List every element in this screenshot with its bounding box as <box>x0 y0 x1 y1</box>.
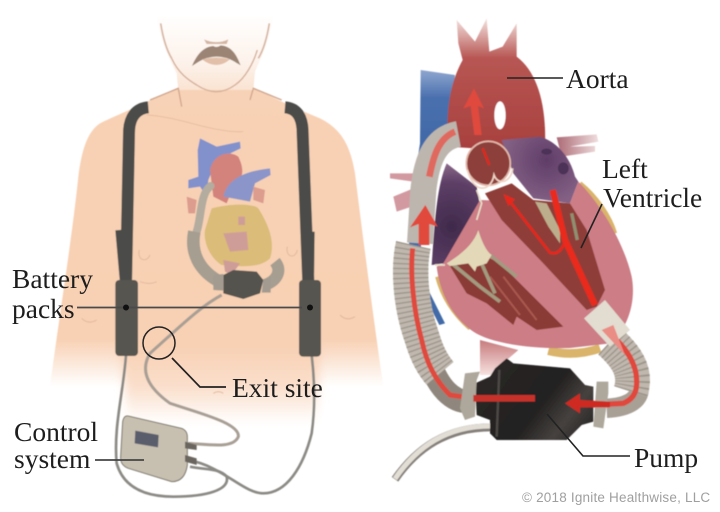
cannula outflow glow <box>602 325 625 355</box>
panel: patient body with device <box>50 17 383 497</box>
battery line <box>77 306 302 308</box>
small inflow corrugated graft <box>193 232 217 280</box>
driveline <box>145 295 238 445</box>
right atrium <box>432 163 480 265</box>
tricuspid valve <box>447 230 492 272</box>
pulmonary artery <box>223 168 271 202</box>
label: pump: Pump <box>634 442 698 473</box>
pulmonary veins right <box>557 134 598 157</box>
arch opening <box>494 101 506 129</box>
control unit <box>121 416 197 482</box>
pump flow arrow <box>565 393 610 413</box>
label: ventricle: Ventricle <box>603 182 702 213</box>
label: exit site: Exit site <box>232 372 323 403</box>
flow arrowhead <box>503 194 515 206</box>
papillary outlines <box>435 190 482 265</box>
moustache <box>192 45 241 66</box>
small heart <box>187 138 278 299</box>
label: battery packs: Battery <box>12 263 93 294</box>
exit site leader <box>172 358 226 387</box>
aortic valve <box>466 141 510 185</box>
pump flow lines <box>473 388 535 408</box>
great veins <box>188 138 241 197</box>
neck lines <box>150 88 282 107</box>
valve cusps <box>467 168 513 188</box>
pump body <box>475 358 593 440</box>
jaw lines <box>172 50 257 92</box>
aortic arch <box>447 18 545 150</box>
nipples and body lines <box>82 247 355 393</box>
sideburn right <box>258 23 269 58</box>
label: control: Control <box>14 416 98 447</box>
pericardial fat <box>437 183 615 353</box>
atrium spots <box>541 149 569 174</box>
aorta leader <box>507 77 563 79</box>
outflow corrugated graft <box>411 245 473 402</box>
small pump <box>223 270 263 299</box>
label: packs line: packs <box>12 293 75 324</box>
shoulder straps <box>119 107 311 283</box>
left atrium <box>502 137 578 203</box>
right battery cable <box>188 355 314 493</box>
pump leader <box>547 414 630 456</box>
olive leaflet <box>572 213 577 240</box>
blue vena cava <box>408 70 455 325</box>
pump collars <box>460 372 608 428</box>
battery connector dots <box>123 304 313 310</box>
right chamber trabeculae <box>452 255 537 320</box>
connectors <box>185 442 197 465</box>
red flow in ventricle <box>507 197 565 253</box>
fatty heart body <box>205 205 272 266</box>
mitral valve <box>535 202 560 243</box>
left battery cable <box>116 355 227 497</box>
flow arrow in aorta <box>463 88 484 135</box>
label: left: Left <box>602 153 648 184</box>
abdomen fade <box>120 340 320 427</box>
label: system: system <box>14 443 90 474</box>
mouth <box>202 58 230 65</box>
pale lower vein <box>480 340 518 375</box>
copyright: © 2018 Ignite Healthwise, LLC <box>522 490 710 505</box>
thin flow line to valve <box>483 148 489 165</box>
left veins <box>390 173 415 212</box>
myocardium <box>437 182 633 348</box>
face and neck <box>157 17 273 90</box>
sideburn left <box>161 23 172 58</box>
control system leader <box>95 459 144 461</box>
small outflow graft <box>197 186 211 232</box>
leader lines left panel <box>77 308 302 460</box>
nose shadow <box>204 39 228 44</box>
driveline <box>395 426 493 479</box>
outflow arrow <box>410 205 438 245</box>
display <box>135 431 159 447</box>
outflow graft smooth <box>420 132 458 243</box>
heart pink patches <box>223 217 248 275</box>
leader lines right panel <box>507 78 630 456</box>
right branch fringe <box>187 187 265 213</box>
left ventricle leader <box>581 204 602 248</box>
inflow tube <box>593 340 639 408</box>
aorta <box>210 153 242 203</box>
cannula tip <box>584 300 630 347</box>
panel: cross-section heart with LVAD <box>390 18 639 479</box>
cannula blood stream <box>553 190 595 305</box>
battery pack right <box>299 280 321 357</box>
exit site circle <box>143 327 175 359</box>
label: aorta: Aorta <box>566 63 629 94</box>
left ventricle chamber <box>485 183 605 310</box>
pump rim <box>497 370 499 437</box>
shoulder crease <box>147 115 243 132</box>
right ventricle chamber <box>448 255 563 330</box>
torso and arms <box>50 87 383 387</box>
battery pack left <box>115 280 138 356</box>
